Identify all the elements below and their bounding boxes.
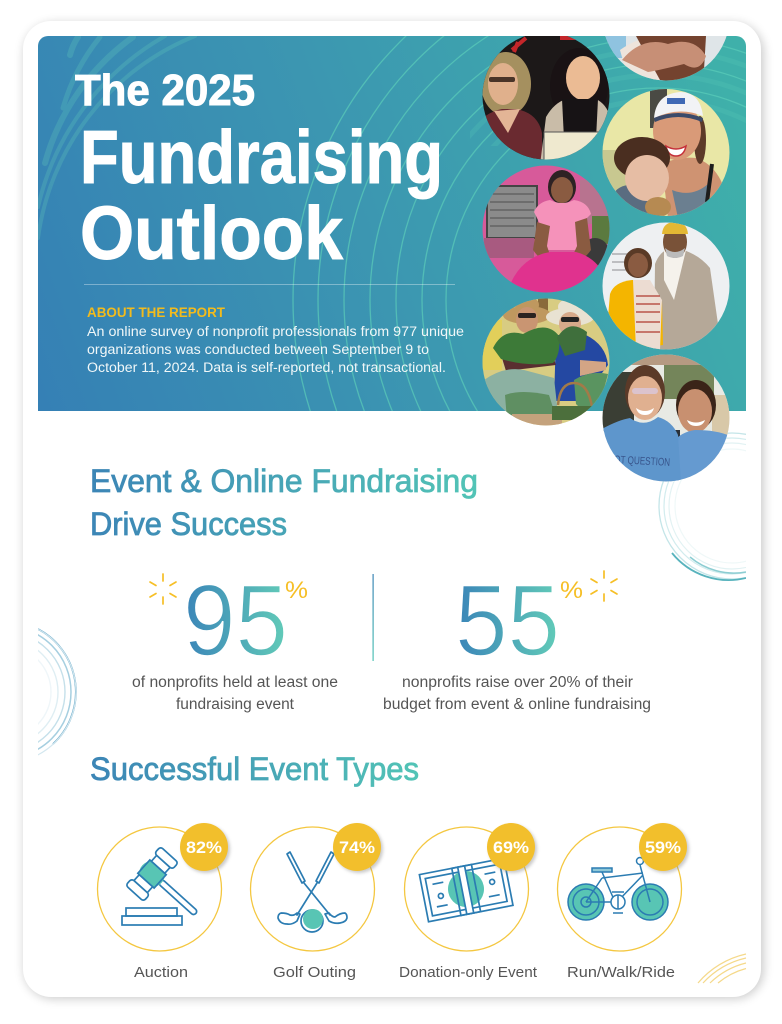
stat: 55 percent xyxy=(383,565,651,713)
badge: 74 percent xyxy=(333,823,383,873)
badge: 82 percent xyxy=(180,823,230,873)
decorative rings: left xyxy=(38,628,77,756)
event: golf outing: Golf Outing xyxy=(273,964,356,981)
badge: 59 percent: 59% xyxy=(645,838,681,857)
stat: 55 percent: % xyxy=(560,577,583,604)
icon: sparkle right xyxy=(591,571,617,601)
stat: 95 percent: % xyxy=(285,577,308,604)
stat: 95 percent: fundraising event xyxy=(176,696,295,713)
event: donation-only event xyxy=(399,823,538,981)
heading: event and online fundraising xyxy=(90,463,478,542)
about the report: organizations was conducted between September 9 to xyxy=(87,342,429,357)
photo: two women in blue t-shirts: OT QUESTION xyxy=(614,454,670,469)
badge: 59 percent xyxy=(639,823,689,873)
event: run walk ride xyxy=(558,823,689,981)
icon: sparkle left xyxy=(150,574,176,604)
about the report xyxy=(87,305,464,375)
title: Fundraising xyxy=(80,115,443,199)
photo: woman in pink tutu and truck xyxy=(482,166,610,292)
stat: 55 percent: 55 xyxy=(455,565,560,677)
badge: 69 percent xyxy=(487,823,537,873)
about the report: ABOUT THE REPORT xyxy=(87,305,226,320)
photo: two women in blue t-shirts xyxy=(600,352,732,484)
icon: banknotes xyxy=(419,858,513,922)
banner background xyxy=(38,36,746,411)
title: The 2025 xyxy=(75,66,255,115)
stat: 95 percent xyxy=(132,565,338,713)
photo: embrace, cropped at banner top xyxy=(606,36,726,80)
badge: 82 percent: 82% xyxy=(186,838,222,857)
photo: two women holding greens xyxy=(480,296,612,428)
event: golf outing xyxy=(250,823,383,981)
stat: 55 percent: budget from event & online fundraising xyxy=(383,696,651,713)
event: donation-only event: Donation-only Event xyxy=(399,964,538,981)
icon: golf clubs xyxy=(278,852,347,932)
decorative rings: right xyxy=(658,432,746,581)
heading: event and online fundraising: Event & Online Fundraising xyxy=(90,463,478,499)
decorative rings: gold corner xyxy=(698,954,746,983)
event: run walk ride: Run/Walk/Ride xyxy=(567,964,675,981)
event: auction xyxy=(98,823,230,981)
photo: couple in yellow jacket and tan suit xyxy=(600,220,732,352)
heading: successful event types: Successful Event Types xyxy=(90,751,419,787)
stat: 95 percent: 95 xyxy=(183,565,288,677)
icon: bicycle xyxy=(568,858,668,920)
photo: mother and child smiling xyxy=(602,89,730,216)
photo: two women with certificate xyxy=(482,36,610,160)
event: auction: Auction xyxy=(134,964,188,981)
stat: 95 percent: of nonprofits held at least one xyxy=(132,674,338,691)
title xyxy=(75,66,443,275)
about the report: October 11, 2024. Data is self-reported, not transactional. xyxy=(87,360,446,375)
badge: 69 percent: 69% xyxy=(493,838,529,857)
badge: 74 percent: 74% xyxy=(339,838,375,857)
icon: gavel xyxy=(122,846,213,933)
title: Outlook xyxy=(80,191,343,275)
about the report: An online survey of nonprofit professionals from 977 unique xyxy=(87,324,464,339)
stat: 55 percent: nonprofits raise over 20% of their xyxy=(402,674,633,691)
heading: event and online fundraising: Drive Success xyxy=(90,506,287,542)
